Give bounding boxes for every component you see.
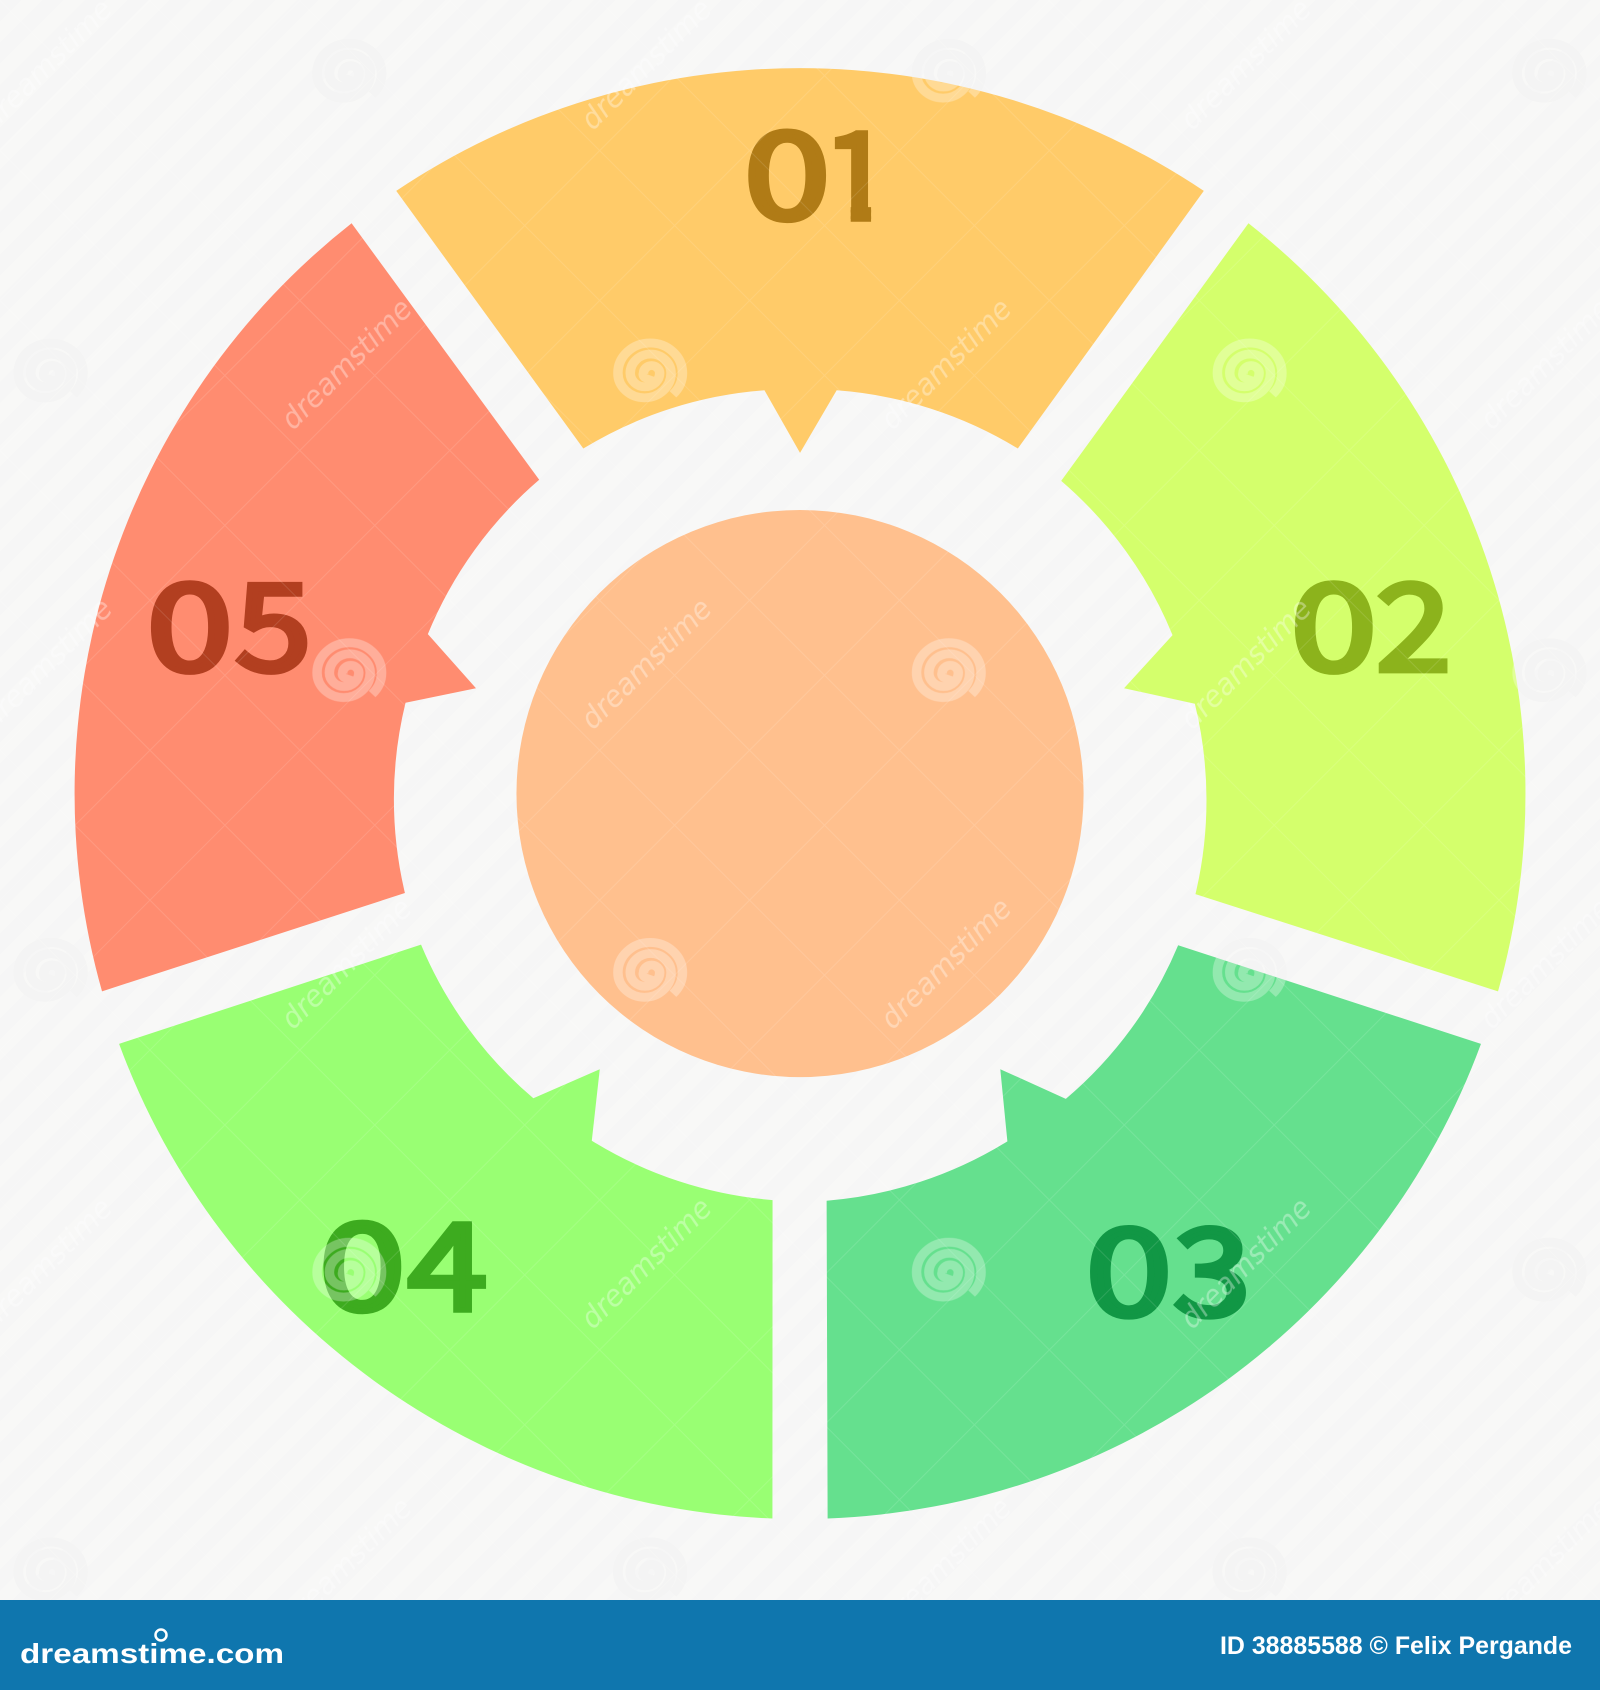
watermark text: dreamstime (574, 1191, 718, 1335)
number 02 (1291, 531, 1451, 706)
footer logo text: dreamstime.com (20, 1638, 284, 1669)
segment 01 (396, 68, 1204, 453)
footer logo spiral (156, 1630, 166, 1640)
number 01 (748, 128, 872, 224)
number 04: 0 (319, 1170, 405, 1345)
number 04: 4 (408, 1170, 487, 1345)
watermark text: dreamstime (274, 891, 419, 1036)
number 04 (319, 1170, 487, 1345)
segment 02 (999, 185, 1600, 1072)
number 03: 3 (1173, 1175, 1251, 1350)
footer bar (0, 1600, 1600, 1690)
number 05 (147, 531, 312, 706)
footer credit: ID 38885588 © Felix Pergande (1220, 1632, 1572, 1660)
watermark text: dreamstime (274, 1491, 419, 1635)
watermark text: dreamstime (874, 891, 1018, 1036)
segment 03 (674, 832, 1553, 1618)
watermark text: dreamstime (1173, 591, 1318, 736)
ring diagram (74, 68, 1526, 1518)
number 05: 5 (235, 531, 312, 706)
center circle (516, 510, 1084, 1077)
number 03 (1086, 1175, 1251, 1350)
segment 05 (0, 185, 601, 1072)
watermark text: dreamstime (274, 292, 419, 436)
number 03: 0 (1086, 1175, 1172, 1350)
segment 04 (47, 832, 926, 1618)
number 02: 2 (1376, 531, 1451, 706)
number 01: 0 (744, 79, 830, 254)
watermark text: dreamstime (1173, 1191, 1318, 1335)
number 01: 1 (823, 79, 892, 254)
watermark text: dreamstime (874, 1491, 1018, 1635)
number 02: 0 (1291, 531, 1377, 706)
number 05: 0 (147, 531, 233, 706)
watermark text: dreamstime (574, 591, 718, 736)
watermark text: dreamstime (874, 292, 1018, 436)
